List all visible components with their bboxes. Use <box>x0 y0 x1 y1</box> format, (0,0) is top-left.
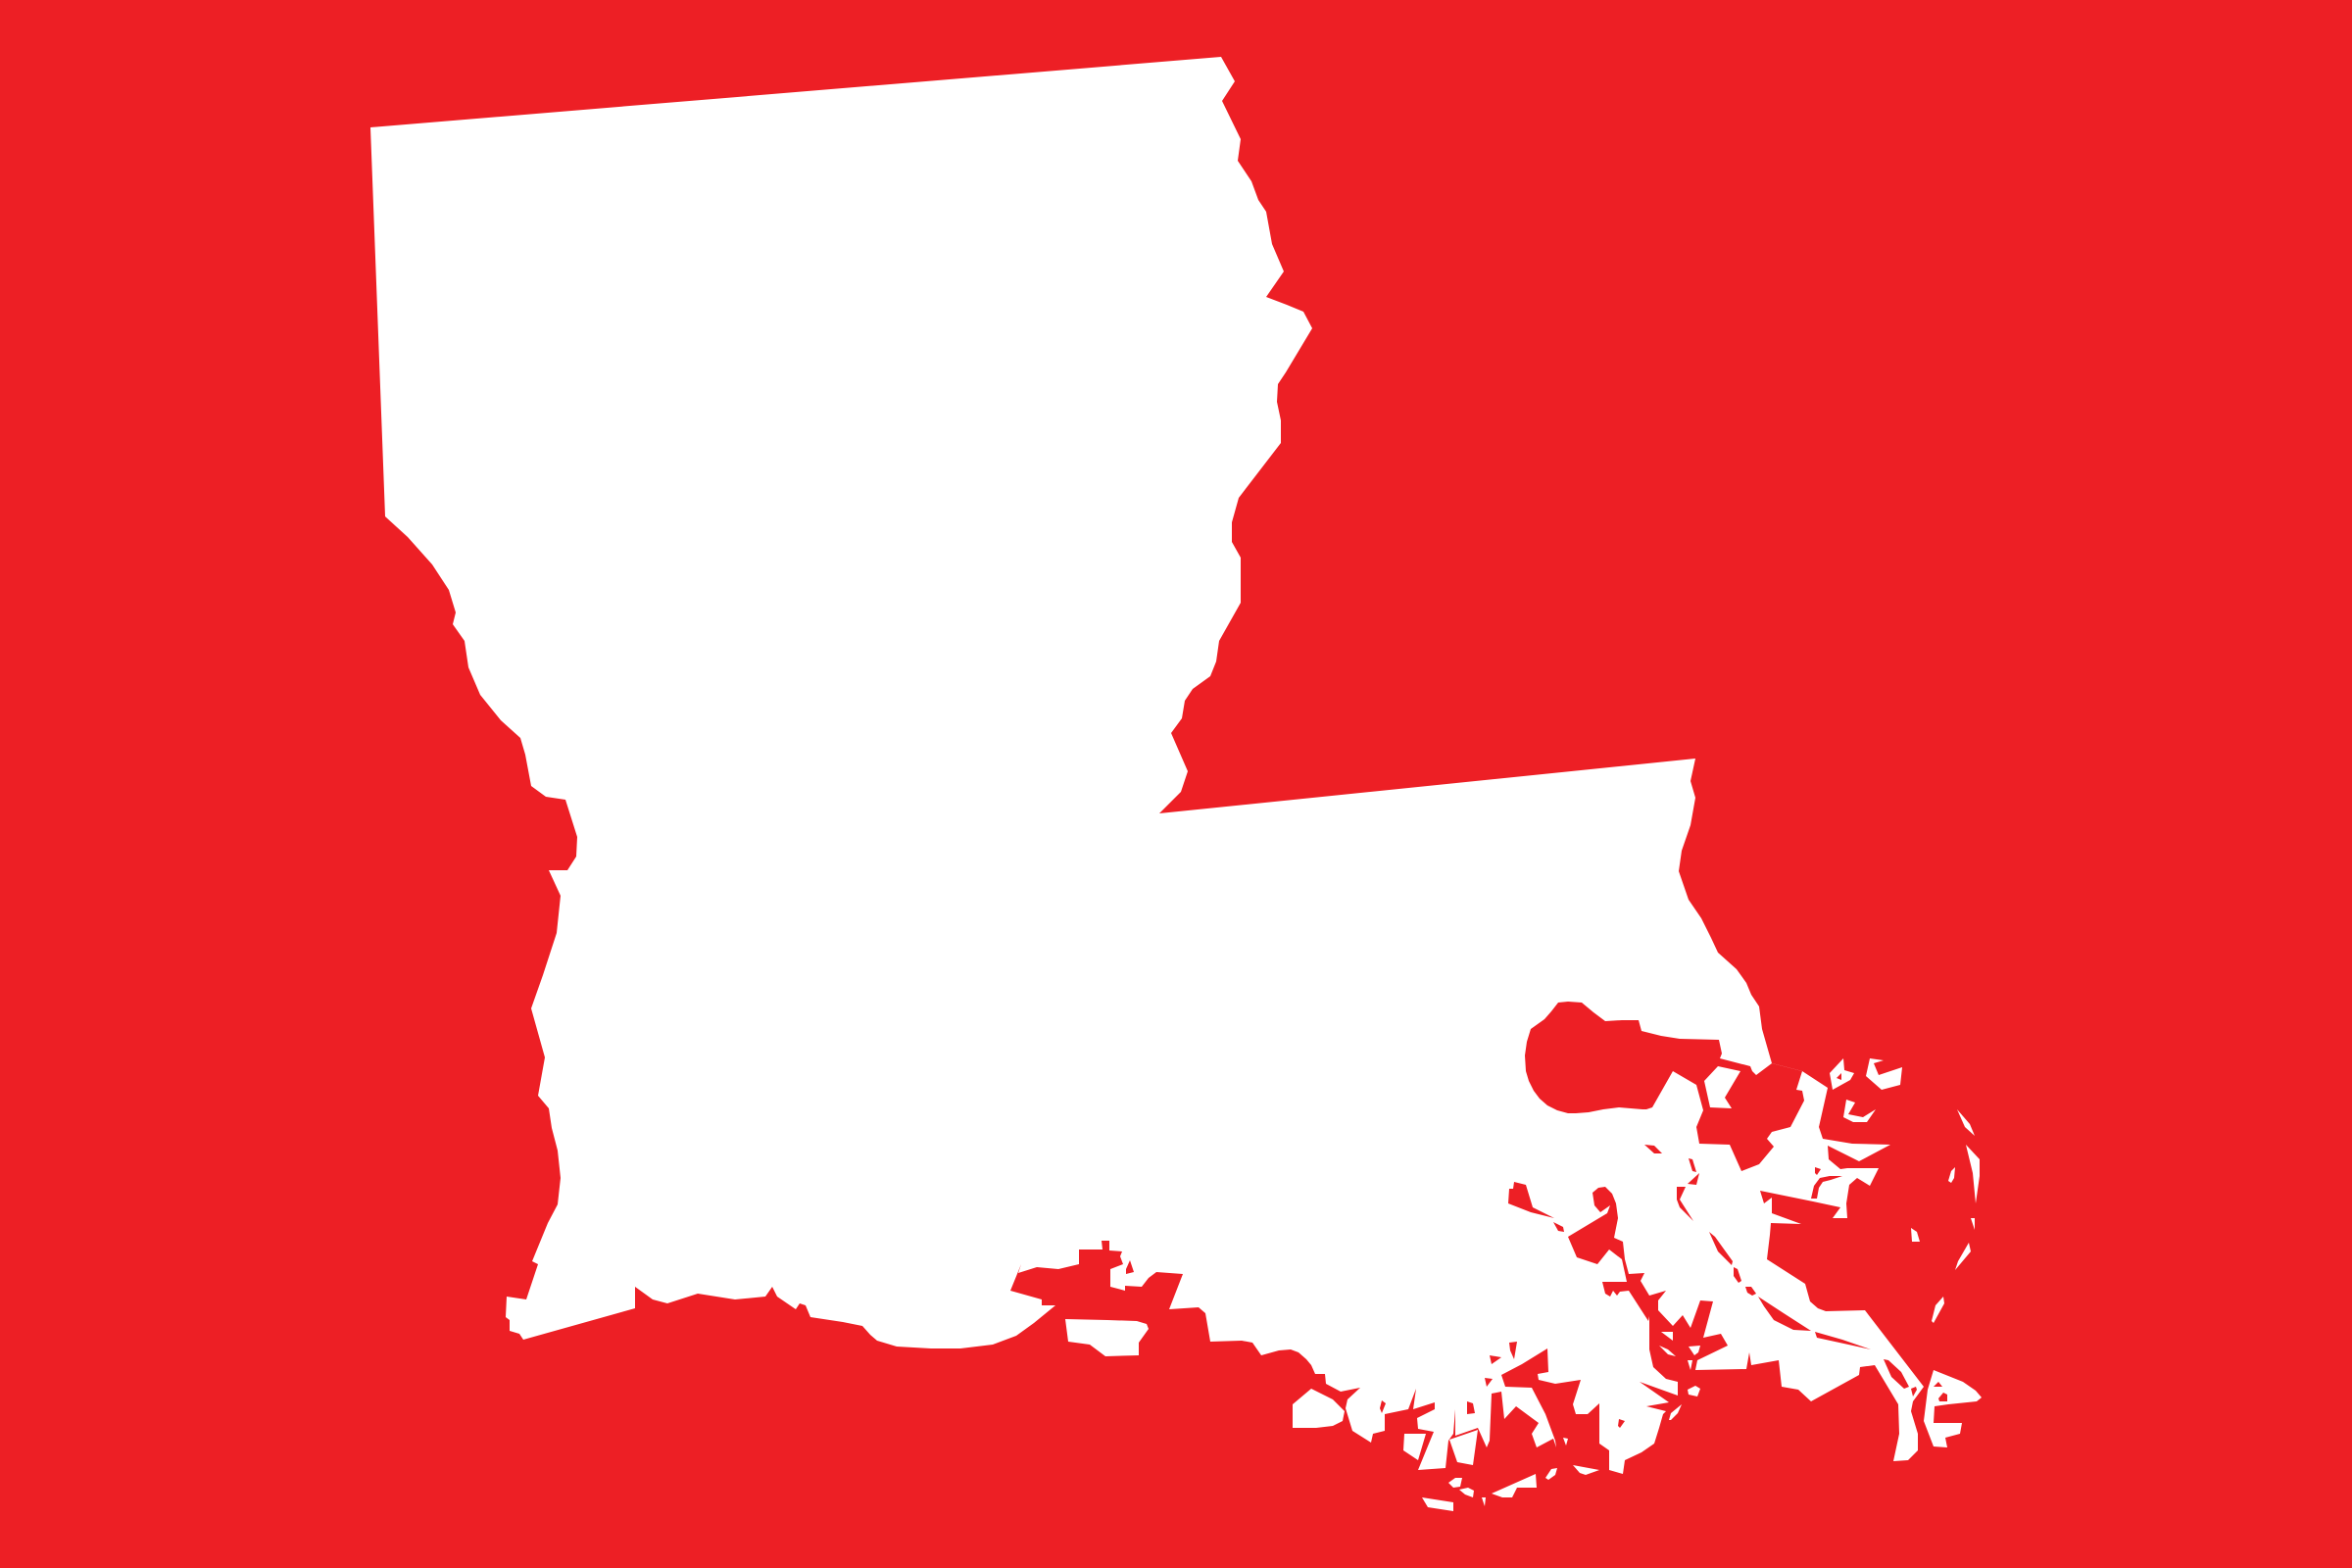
map: white silhouette of Louisiana <box>370 57 1982 1511</box>
water: small ponds within islands <box>1837 1073 1947 1401</box>
state outline: mainland <box>370 57 1924 1474</box>
water: Lake Pontchartrain and connected bay <box>1525 1002 1804 1171</box>
islands: white coastal islands and marsh fragments <box>1065 1058 1982 1511</box>
water: inland marsh channels and ponds <box>1126 1145 1917 1428</box>
